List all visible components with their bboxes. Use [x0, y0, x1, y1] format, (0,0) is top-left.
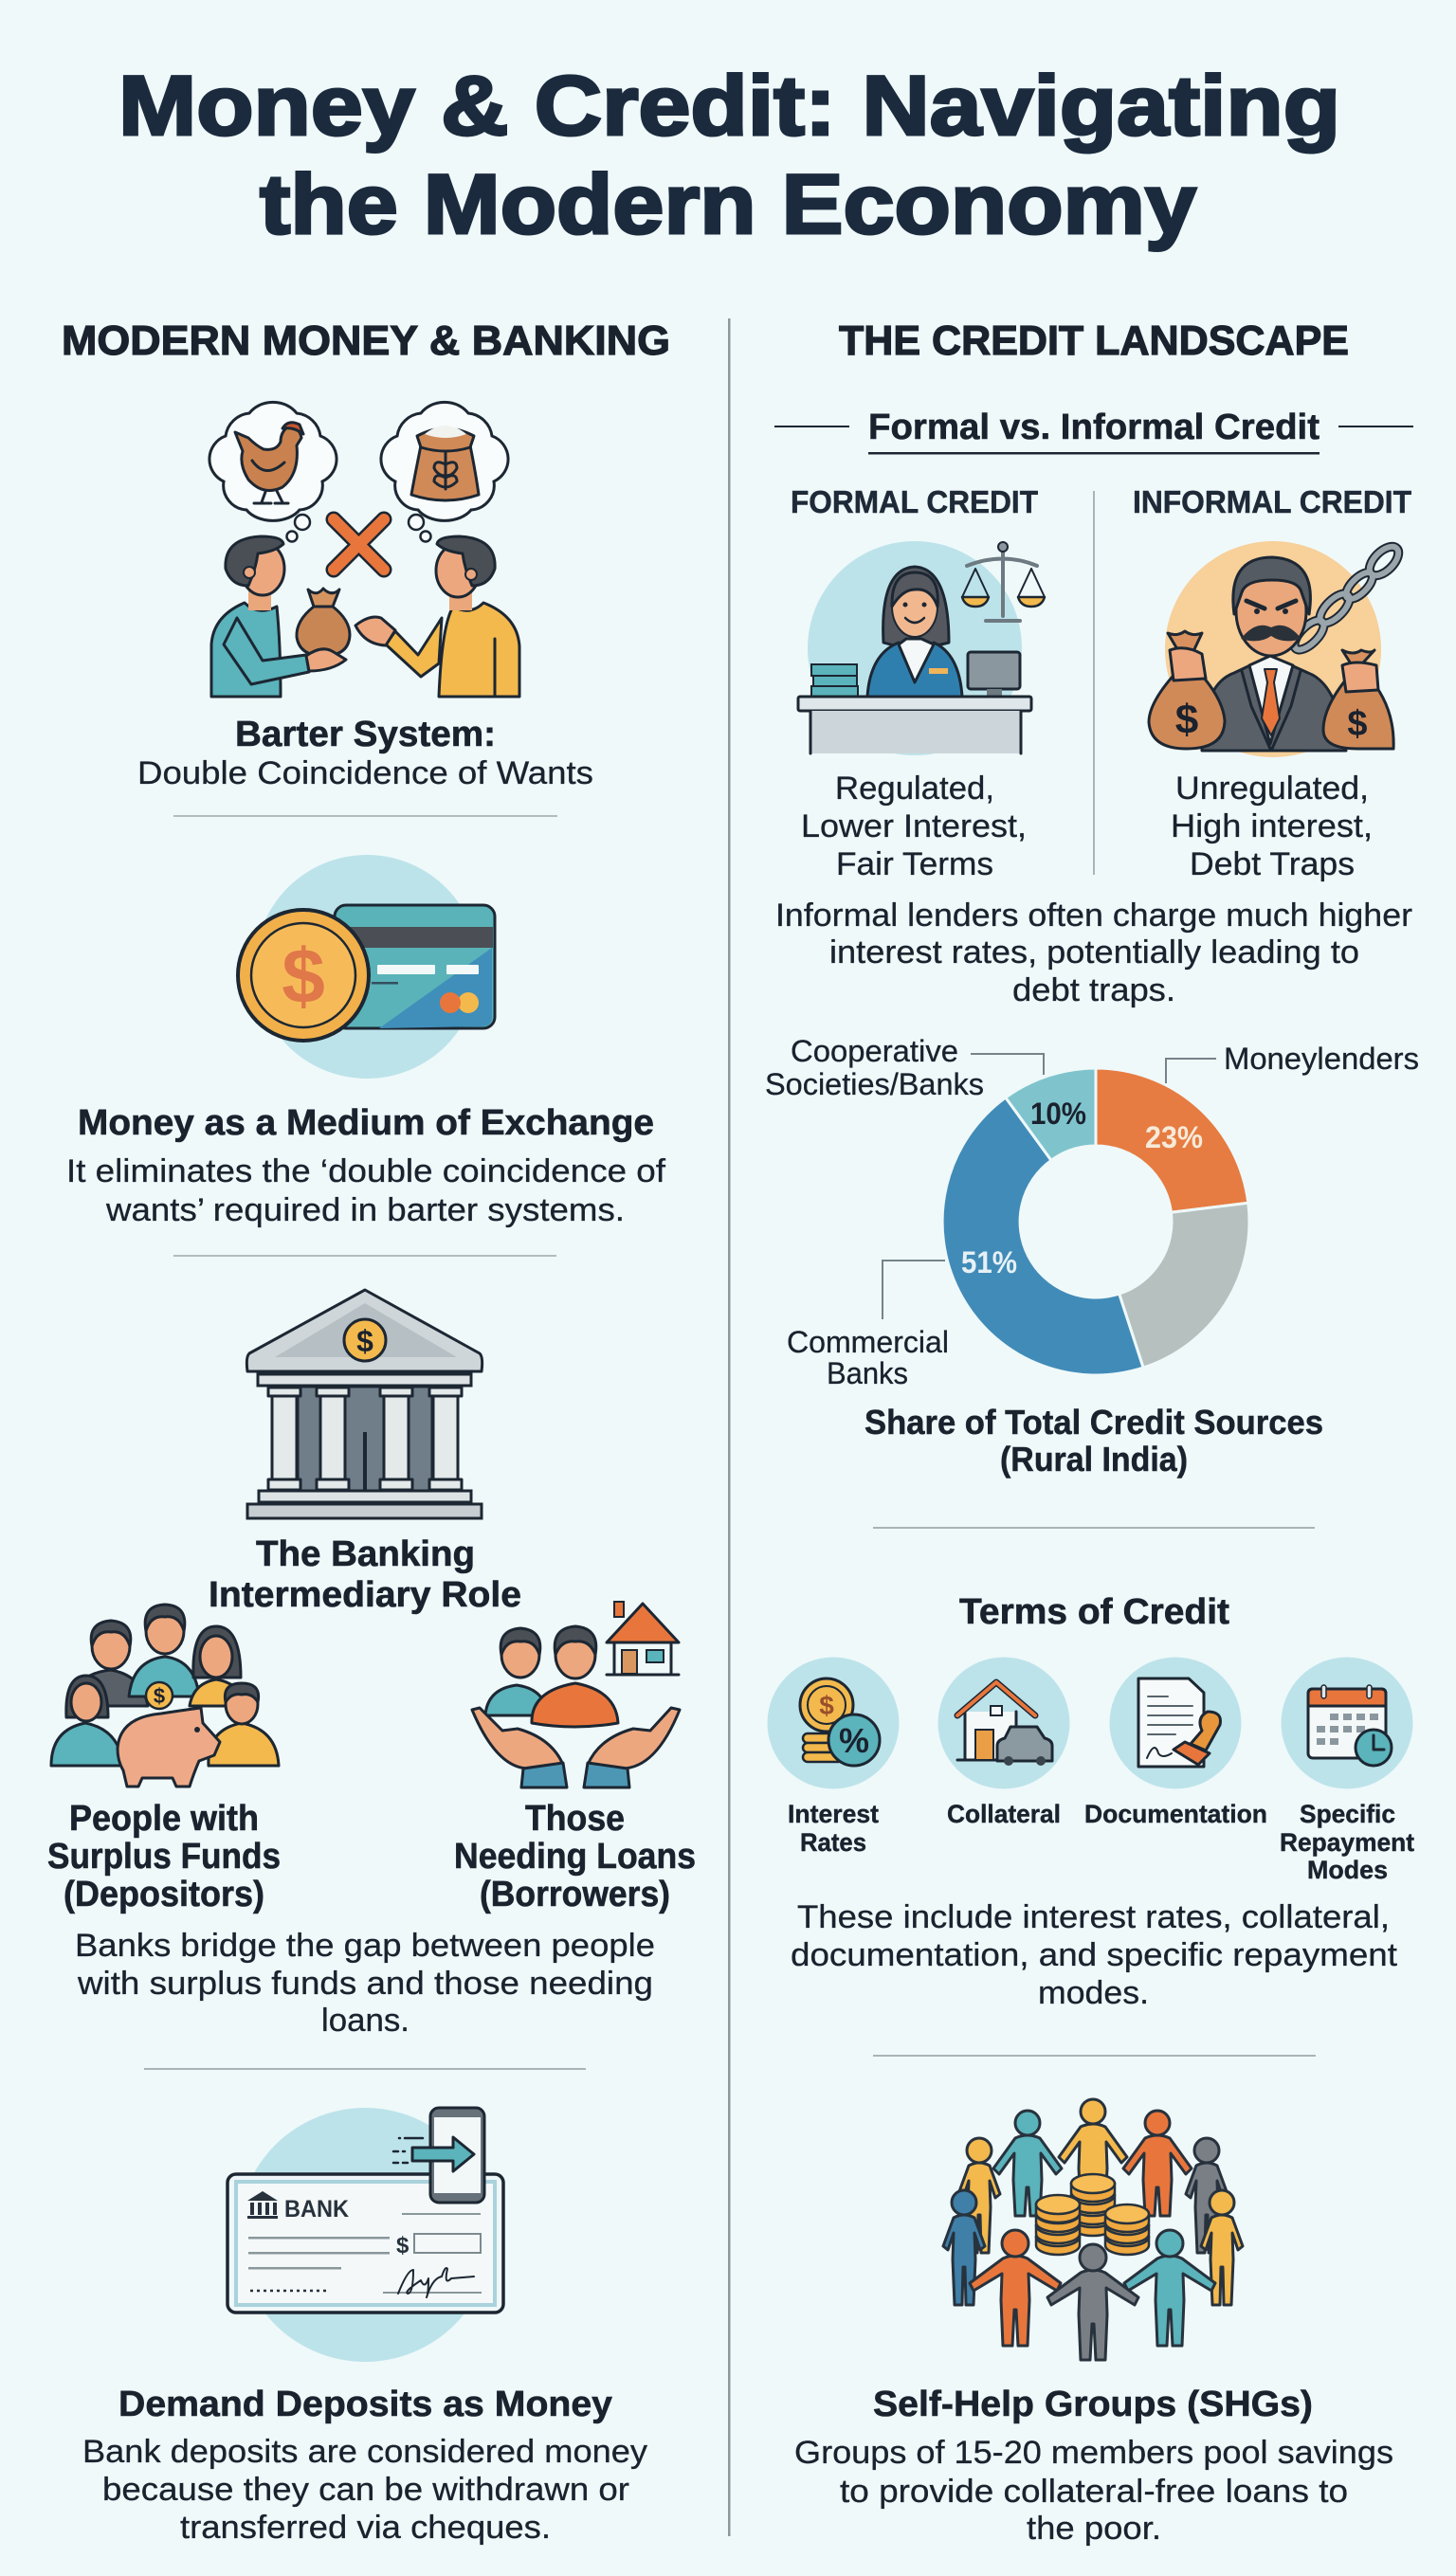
value: 51 percent: 51% — [961, 1245, 1017, 1279]
text: barter system: Barter System: — [235, 715, 496, 754]
text: borrowers: Needing Loans — [454, 1837, 696, 1877]
icon: bank building: $ — [356, 1324, 373, 1358]
text: depositors — [47, 1799, 281, 1914]
label: specific repayment modes: Repayment — [1280, 1828, 1414, 1857]
icon: depositors with piggy bank — [51, 1605, 279, 1787]
text: depositors: (Depositors) — [64, 1875, 264, 1914]
segment: cooperative societies — [1006, 1068, 1096, 1160]
leader lines — [883, 1054, 1216, 1319]
icon: interest rates — [768, 1657, 899, 1789]
text: informal credit traits — [1171, 771, 1373, 882]
title: Money & Credit: Navigating — [118, 58, 1340, 153]
text: formal credit traits: Regulated, — [835, 771, 994, 807]
label: collateral: Collateral — [947, 1800, 1061, 1828]
icon row: terms of credit — [768, 1657, 1414, 1884]
text: banks bridge the gap: Banks bridge the gap between people — [75, 1928, 655, 1964]
subheading: formal vs informal credit: Formal vs. Informal Credit — [868, 408, 1320, 447]
icon: grain sack — [411, 426, 479, 500]
text: demand deposits: transferred via cheques. — [180, 2510, 551, 2546]
thought cloud right — [381, 402, 508, 520]
title: the Modern Economy — [260, 156, 1197, 251]
text: borrowers — [454, 1799, 696, 1914]
title — [118, 58, 1340, 251]
thought cloud left — [209, 402, 337, 520]
icon: coin and credit card: $ — [282, 934, 325, 1020]
heading: credit landscape: THE CREDIT LANDSCAPE — [839, 317, 1349, 364]
text: banks bridge the gap — [75, 1928, 655, 2039]
text: depositors: People with — [69, 1799, 259, 1839]
text: banking intermediary role: The Banking — [256, 1534, 475, 1574]
icon: borrowers with hands and house — [472, 1602, 680, 1787]
icon: coin and credit card — [238, 855, 495, 1079]
text: informal lenders note: debt traps. — [1012, 972, 1175, 1008]
text: money as medium of exchange — [66, 1103, 666, 1228]
icon: interest rates: $ — [819, 1691, 834, 1720]
coin stacks — [1036, 2174, 1149, 2255]
text: self-help groups: to provide collateral-free loans to — [840, 2474, 1348, 2510]
value: 10 percent: 10% — [1030, 1097, 1086, 1131]
label: commercial banks — [787, 1325, 949, 1390]
segment: commercial banks — [942, 1098, 1143, 1375]
label: specific repayment modes: Modes — [1307, 1856, 1388, 1884]
text: banking intermediary role: Intermediary Role — [209, 1575, 521, 1615]
panel: the credit landscape — [765, 317, 1419, 2547]
label: cooperative societies: Societies/Banks — [765, 1067, 984, 1101]
segment: other sources — [1119, 1203, 1249, 1368]
segment: moneylenders — [1096, 1068, 1248, 1212]
text: money as medium of exchange: It eliminates the ‘double coincidence of — [66, 1153, 666, 1189]
text: informal credit traits: Debt Traps — [1190, 846, 1355, 882]
label: cooperative societies: Cooperative — [791, 1034, 958, 1068]
column: formal credit — [791, 484, 1045, 882]
label: documentation: Documentation — [1084, 1800, 1267, 1828]
text: terms description — [791, 1899, 1398, 2011]
text: barter system — [137, 715, 593, 791]
money bag — [297, 589, 350, 671]
text: self-help groups: Self-Help Groups (SHGs) — [873, 2385, 1313, 2424]
icon: bank building — [246, 1290, 482, 1518]
icon: chicken — [235, 423, 303, 503]
heading: modern money and banking: MODERN MONEY & BANKING — [62, 317, 670, 364]
chain — [1289, 541, 1404, 655]
text: terms description: These include interest rates, collateral, — [797, 1899, 1390, 1935]
text: formal credit traits: Lower Interest, — [801, 808, 1027, 844]
person right — [355, 536, 519, 697]
text: borrowers: (Borrowers) — [480, 1875, 670, 1914]
text: formal credit traits: Fair Terms — [836, 846, 993, 882]
label: specific repayment modes — [1280, 1800, 1414, 1884]
value: 23 percent: 23% — [1145, 1120, 1203, 1154]
text: formal credit traits — [801, 771, 1027, 882]
text: banking intermediary role — [209, 1534, 521, 1615]
text: terms description: documentation, and specific repayment — [791, 1937, 1398, 1973]
icon: red cross — [334, 519, 384, 570]
icon: cheque and phone — [228, 2108, 503, 2362]
label: specific repayment modes: Specific — [1300, 1800, 1395, 1828]
icon: depositors with piggy bank: $ — [154, 1684, 165, 1708]
text: informal lenders note: interest rates, potentially leading to — [829, 934, 1359, 971]
text: informal lenders note — [775, 898, 1412, 1008]
heading: informal credit: INFORMAL CREDIT — [1133, 484, 1411, 519]
icon: repayment modes calendar — [1282, 1657, 1412, 1789]
icon: moneylender with chain and bags — [1149, 541, 1404, 757]
chart caption: Share of Total Credit Sources — [864, 1403, 1323, 1442]
text: self-help groups — [794, 2385, 1393, 2547]
heading: terms of credit: Terms of Credit — [959, 1592, 1229, 1632]
icon: interest rates: % — [839, 1721, 869, 1760]
text: money as medium of exchange: wants’ required in barter systems. — [105, 1192, 625, 1228]
text: demand deposits — [82, 2385, 647, 2546]
column: informal credit — [1133, 484, 1411, 882]
column divider — [728, 318, 730, 2536]
icon: documentation — [1109, 1657, 1242, 1789]
text: informal credit traits: Unregulated, — [1175, 771, 1369, 807]
text: demand deposits: because they can be withdrawn or — [102, 2472, 629, 2508]
icon: self-help group circle — [943, 2099, 1243, 2360]
icon: moneylender with chain and bags: $ — [1347, 704, 1368, 744]
text: banks bridge the gap: with surplus funds and those needing — [77, 1966, 653, 2002]
icon: bank teller with scales — [798, 541, 1045, 755]
text: demand deposits: Demand Deposits as Money — [118, 2385, 612, 2424]
icon: barter illustration — [209, 402, 519, 697]
label: interest rates: Rates — [800, 1828, 866, 1857]
text: self-help groups: the poor. — [1027, 2511, 1161, 2547]
label: commercial banks: Banks — [827, 1356, 908, 1390]
donut chart: credit sources — [765, 1034, 1419, 1390]
icon: moneylender with chain and bags: $ — [1175, 697, 1198, 743]
label: interest rates — [788, 1800, 879, 1857]
thought bubbles — [286, 515, 430, 542]
label: interest rates: Interest — [788, 1800, 879, 1828]
panel: modern money and banking — [47, 317, 696, 2546]
text: self-help groups: Groups of 15-20 members pool savings — [794, 2435, 1393, 2471]
person left — [211, 536, 309, 697]
text: borrowers: Those — [525, 1799, 625, 1839]
chart caption: (Rural India) — [1000, 1440, 1188, 1478]
icon: cheque and phone: $ — [396, 2233, 410, 2259]
text: terms description: modes. — [1038, 1975, 1149, 2011]
chart caption — [864, 1403, 1323, 1478]
label: cooperative societies — [765, 1034, 984, 1101]
icon: collateral — [938, 1657, 1069, 1789]
text: informal credit traits: High interest, — [1171, 808, 1373, 844]
text: banks bridge the gap: loans. — [321, 2003, 410, 2039]
text: depositors: Surplus Funds — [47, 1837, 281, 1877]
text: demand deposits: Bank deposits are considered money — [82, 2434, 647, 2470]
heading: formal credit: FORMAL CREDIT — [791, 484, 1038, 519]
label: moneylenders: Moneylenders — [1224, 1042, 1419, 1076]
text: money as medium of exchange: Money as a Medium of Exchange — [78, 1103, 654, 1143]
text: informal lenders note: Informal lenders often charge much higher — [775, 898, 1412, 934]
text: barter system: Double Coincidence of Wants — [137, 755, 593, 791]
label: commercial banks: Commercial — [787, 1325, 949, 1359]
icon: cheque and phone: BANK — [284, 2196, 349, 2222]
